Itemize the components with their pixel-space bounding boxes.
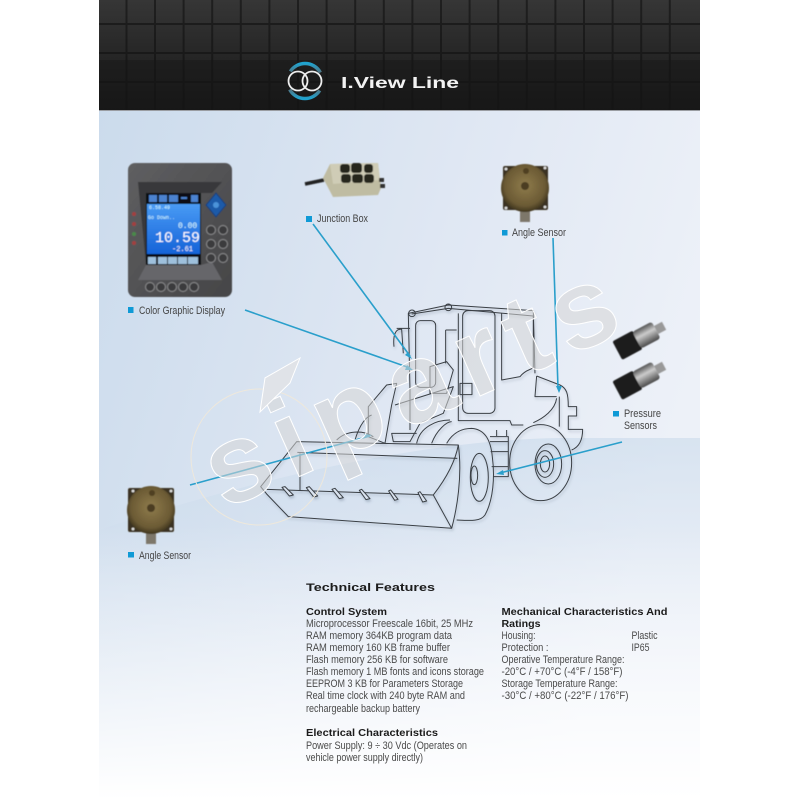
rear body: [533, 376, 583, 450]
title: I.View Line: [341, 75, 459, 92]
page background: [99, 110, 700, 800]
label: color graphic display: Color Graphic Display: [139, 305, 225, 317]
pressure sensor lower: [612, 356, 669, 400]
text block: mechanical characteristics and ratings: Ratings: [502, 618, 541, 630]
label: pressure sensors: Sensors: [624, 420, 657, 432]
text block: mechanical characteristics and ratings: Plastic: [632, 630, 658, 642]
display housing: [128, 163, 232, 297]
display keypad: [132, 193, 228, 292]
arrow lines: [190, 224, 622, 485]
label: angle sensor top: Angle Sensor: [512, 227, 566, 239]
text block: control system: RAM memory 160 KB frame buffer: [306, 642, 450, 654]
display screen: Go Down..: [148, 215, 175, 221]
label: angle sensor left: [128, 550, 191, 562]
text block: control system: Microprocessor Freescale 16bit, 25 MHz: [306, 618, 473, 630]
cab: [394, 304, 535, 425]
label: junction box: Junction Box: [317, 213, 368, 225]
text block: mechanical characteristics and ratings: Operative Temperature Range:: [502, 654, 624, 666]
text block: control system: Flash memory 256 KB for software: [306, 654, 448, 666]
watermark: siparts: siparts: [183, 239, 636, 532]
text block: control system: [306, 606, 484, 715]
icon: pressure sensors: [612, 316, 669, 400]
text block: control system: EEPROM 3 KB for Parameters Storage: [306, 678, 463, 690]
display screen: 10.59: [155, 230, 200, 247]
display screen: 0.00: [178, 222, 197, 231]
arrow: color graphic display: [245, 310, 413, 370]
label: angle sensor left: Angle Sensor: [139, 550, 191, 562]
text block: control system: Real time clock with 240 byte RAM and: [306, 690, 465, 702]
text block: electrical characteristics: vehicle power supply directly): [306, 752, 423, 764]
heading: technical features: Technical Features: [306, 582, 435, 594]
display screen: [146, 193, 201, 265]
text block: mechanical characteristics and ratings: Housing:: [502, 630, 536, 642]
icon: angle sensor top: [501, 164, 549, 222]
arrow: angle sensor left: [190, 434, 372, 485]
text block: electrical characteristics: [306, 727, 467, 764]
bucket: [261, 442, 460, 528]
pressure sensor upper: [612, 316, 669, 360]
panel: junction box: [305, 163, 385, 197]
label: junction box: [306, 213, 368, 225]
text block: mechanical characteristics and ratings: -30°C / +80°C (-22°F / 176°F): [502, 690, 628, 702]
icon: logo rings: [288, 64, 322, 98]
text block: mechanical characteristics and ratings: Mechanical Characteristics And: [502, 606, 668, 618]
text block: mechanical characteristics and ratings: IP65: [632, 642, 650, 654]
arrow: junction box: [313, 224, 412, 359]
text block: mechanical characteristics and ratings: Storage Temperature Range:: [502, 678, 618, 690]
chassis: [490, 430, 508, 477]
text block: control system: Flash memory 1 MB fonts and icons storage: [306, 666, 484, 678]
icon: angle sensor left: [127, 486, 175, 544]
text block: mechanical characteristics and ratings: [502, 606, 668, 702]
display screen: -2.61: [172, 246, 193, 254]
text block: mechanical characteristics and ratings: Protection :: [502, 642, 548, 654]
text block: control system: RAM memory 364KB program data: [306, 630, 453, 642]
text block: control system: rechargeable backup battery: [306, 703, 420, 715]
text block: mechanical characteristics and ratings: -20°C / +70°C (-4°F / 158°F): [502, 666, 622, 678]
lift arms: [337, 383, 453, 443]
rear wheel: [510, 425, 572, 501]
panel: color graphic display: [128, 163, 232, 297]
label: pressure sensors: Pressure: [624, 408, 661, 420]
loader line drawing: [261, 304, 583, 528]
front wheel: [447, 428, 493, 520]
display screen: 6.58.49: [149, 205, 170, 211]
text block: control system: Control System: [306, 606, 387, 618]
label: pressure sensors: [613, 408, 661, 432]
arrow: angle sensor top: [553, 238, 562, 393]
text block: electrical characteristics: Electrical Characteristics: [306, 727, 438, 739]
arrow: pressure sensors: [496, 442, 622, 475]
text block: electrical characteristics: Power Supply: 9 ÷ 30 Vdc (Operates on: [306, 740, 467, 752]
header band: [99, 0, 700, 111]
